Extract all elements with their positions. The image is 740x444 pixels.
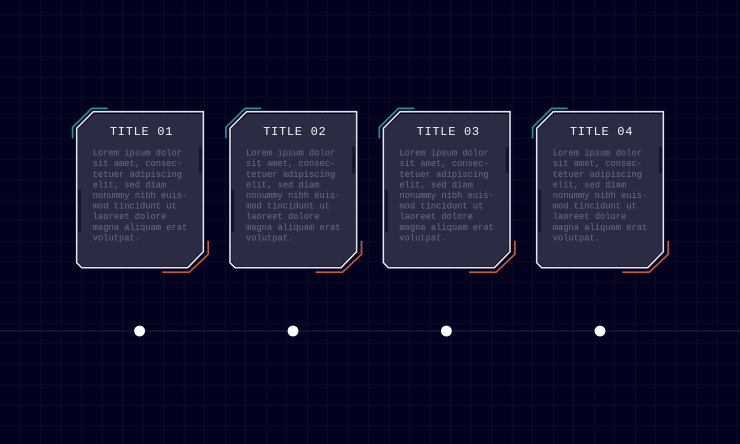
card 3 background bbox=[385, 114, 509, 266]
card 4 body text: sit amet, consec- bbox=[553, 159, 642, 169]
card 1 body text: nonummy nibh euis- bbox=[93, 191, 187, 201]
card 2 teal corner bbox=[226, 108, 261, 138]
card 3 body text: magna aliquam erat bbox=[399, 223, 494, 233]
card 4 body text: magna aliquam erat bbox=[553, 223, 647, 233]
card 4 teal corner bbox=[533, 108, 568, 138]
card 1 body text: sit amet, consec- bbox=[93, 159, 182, 169]
card 4 body text: nonummy nibh euis- bbox=[553, 191, 647, 201]
card 1 outline bbox=[77, 112, 203, 268]
card 1 body text: tetuer adipiscing bbox=[93, 170, 182, 180]
timeline dot 3 bbox=[441, 326, 452, 336]
card 1 teal corner bbox=[73, 108, 108, 138]
card 2 body text: elit, sed diam bbox=[246, 180, 320, 190]
card 3 body text: mod tincidunt ut bbox=[399, 202, 483, 212]
card 1 body text: Lorem ipsum dolor bbox=[93, 149, 182, 159]
card 2 body text: nonummy nibh euis- bbox=[246, 191, 341, 201]
card 1 side notches bbox=[78, 147, 202, 232]
panel: card 2 bbox=[226, 108, 362, 272]
card 3 title: TITLE 03 bbox=[417, 125, 480, 139]
timeline dot 1 bbox=[134, 326, 145, 336]
panel: card 3 bbox=[379, 108, 515, 272]
card 3 body text: volutpat. bbox=[399, 233, 447, 243]
card 3 body text: tetuer adipiscing bbox=[399, 170, 489, 180]
card 4 body text: volutpat. bbox=[553, 233, 600, 243]
card 4 body text: Lorem ipsum dolor bbox=[553, 149, 642, 159]
card 2 title: TITLE 02 bbox=[263, 125, 326, 139]
card 4 body text: elit, sed diam bbox=[553, 180, 626, 190]
card 4 body text: laoreet dolore bbox=[553, 212, 626, 222]
card 2 outline bbox=[230, 112, 357, 268]
card 2 body text: mod tincidunt ut bbox=[246, 202, 330, 212]
card 3 orange corner bbox=[469, 241, 515, 272]
card 2 body text: laoreet dolore bbox=[246, 212, 320, 222]
card 4 body text: mod tincidunt ut bbox=[553, 202, 637, 212]
card 3 body text: nonummy nibh euis- bbox=[399, 191, 494, 201]
card 1 background bbox=[78, 114, 202, 266]
panel: card 4 bbox=[533, 108, 668, 272]
card 1 body text: magna aliquam erat bbox=[93, 223, 187, 233]
card 2 orange corner bbox=[316, 241, 362, 272]
card 3 body text: Lorem ipsum dolor bbox=[399, 149, 489, 159]
card 1 orange corner bbox=[162, 241, 208, 272]
card 2 body text: tetuer adipiscing bbox=[246, 170, 335, 180]
card 1 body text: laoreet dolore bbox=[93, 212, 166, 222]
card 1 title: TITLE 01 bbox=[110, 125, 173, 139]
card 2 body text: volutpat. bbox=[246, 233, 293, 243]
card 1 body text: elit, sed diam bbox=[93, 180, 166, 190]
card 3 body text: laoreet dolore bbox=[399, 212, 473, 222]
card 4 body text: tetuer adipiscing bbox=[553, 170, 642, 180]
card 1 body text: volutpat. bbox=[93, 233, 140, 243]
card 2 side notches bbox=[231, 147, 355, 232]
card 4 outline bbox=[537, 112, 663, 268]
card 2 body text: sit amet, consec- bbox=[246, 159, 335, 169]
card 3 side notches bbox=[385, 147, 509, 232]
card 3 body text: elit, sed diam bbox=[399, 180, 473, 190]
timeline dot 4 bbox=[595, 326, 605, 336]
card 2 body text: magna aliquam erat bbox=[246, 223, 341, 233]
card 3 body text: sit amet, consec- bbox=[399, 159, 489, 169]
card 3 outline bbox=[383, 112, 510, 268]
timeline line bbox=[0, 330, 740, 332]
card 1 body text: mod tincidunt ut bbox=[93, 202, 177, 212]
card 4 side notches bbox=[538, 147, 662, 232]
card 4 background bbox=[538, 114, 662, 266]
card 2 body text: Lorem ipsum dolor bbox=[246, 149, 335, 159]
card 2 background bbox=[231, 114, 355, 266]
card 3 teal corner bbox=[379, 108, 414, 138]
timeline dot 2 bbox=[288, 326, 298, 336]
card 4 orange corner bbox=[622, 241, 668, 272]
panel: card 1 bbox=[73, 108, 208, 272]
card 4 title: TITLE 04 bbox=[570, 125, 633, 139]
